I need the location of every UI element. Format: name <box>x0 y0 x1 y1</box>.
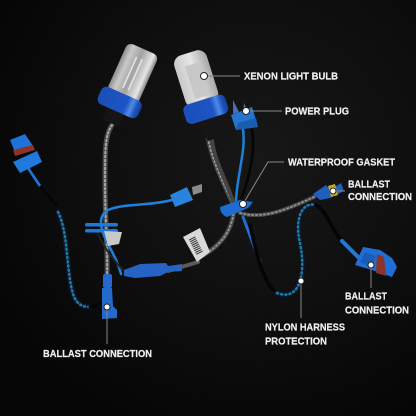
callout: ballast connection bottom right: BALLAST <box>345 292 387 302</box>
callout: waterproof gasket: WATERPROOF GASKET <box>288 158 395 168</box>
left bulb base <box>102 104 126 127</box>
wires: blue H-plug lead <box>97 200 172 274</box>
icon: waterproof gasket <box>220 200 253 217</box>
callout: xenon light bulb <box>200 72 338 82</box>
left bulb filament <box>123 57 142 90</box>
cable: right braided harnesses <box>168 138 314 271</box>
cable: left braided harness <box>105 125 112 278</box>
icon: right ballast connector <box>313 183 344 200</box>
callout: ballast connection right: BALLAST <box>348 180 390 190</box>
icon: H plug <box>170 184 202 207</box>
left bulb blue collar <box>96 85 144 120</box>
icon: left xenon bulb <box>90 40 164 132</box>
right bulb filament <box>185 62 209 99</box>
icon: white tag <box>104 231 122 246</box>
icon: bottom-left ballast connector <box>102 274 117 319</box>
wires: right loop with nylon sleeve <box>243 205 358 295</box>
wires: left loop with nylon sleeve <box>40 186 102 307</box>
right bulb glass <box>172 48 220 110</box>
callout: nylon harness protection: NYLON HARNESS <box>265 322 345 334</box>
callout: ballast connection right <box>330 180 412 203</box>
callout: power plug: POWER PLUG <box>285 106 349 118</box>
callout: ballast connection right: CONNECTION <box>348 192 412 203</box>
icon: barcode label <box>183 228 210 262</box>
icon: bottom-right ballast connector <box>355 247 397 277</box>
callout: ballast connection bottom right: CONNECTION <box>345 306 409 316</box>
right bulb base <box>200 112 223 141</box>
wires: power plug leads <box>236 130 253 200</box>
callout: power plug <box>242 106 349 118</box>
callout: nylon harness protection <box>265 278 345 348</box>
icon: power plug <box>231 100 258 130</box>
icon: left ballast connector <box>10 134 42 186</box>
left bulb glass <box>106 42 159 105</box>
callout: xenon light bulb: XENON LIGHT BULB <box>244 72 338 82</box>
callout: nylon harness protection: PROTECTION <box>265 336 327 348</box>
callout: waterproof gasket <box>240 158 395 208</box>
right bulb blue collar <box>182 93 230 125</box>
icon: right xenon bulb <box>167 46 236 145</box>
callout: ballast connection bottom left <box>43 304 152 360</box>
callout: ballast connection bottom right <box>345 262 409 316</box>
callout: ballast connection bottom left: BALLAST CONNECTION <box>43 349 152 360</box>
icon: cable clip <box>85 223 118 232</box>
icon: inline connector <box>124 263 182 278</box>
